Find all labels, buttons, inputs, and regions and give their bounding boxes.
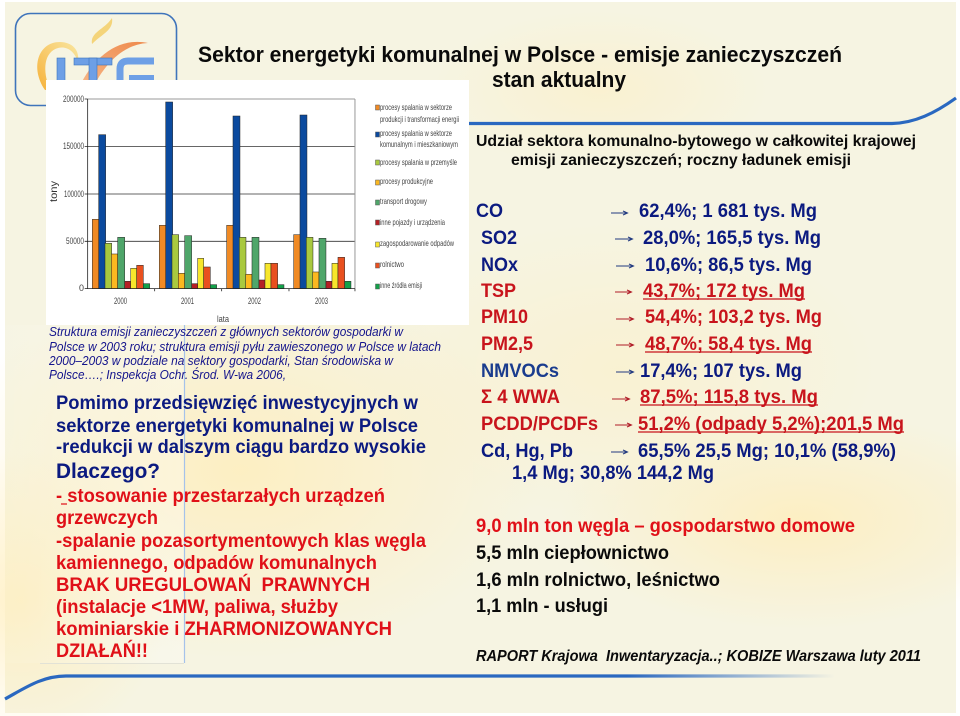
divider: bottom blue curve [5,676,835,699]
chart axis labels [49,94,328,325]
chart legend: produkcji i transformacji energii [380,115,459,124]
chart legend: procesy spalania w sektorze [380,129,452,138]
text block: przyczyny: kominiarskie i ZHARMONIZOWANYCH [56,619,392,640]
row: metale: Cd, Hg, Pb [481,441,573,462]
text block: pomimo przedsięwzięć: Pomimo przedsięwzięć inwestycyjnych w [56,393,418,414]
row: metale: 1,4 Mg; 30,8% 144,2 Mg [512,463,714,484]
text block: pomimo przedsięwzięć [56,393,426,483]
coal consumption list: 1,1 mln - usługi [476,596,608,617]
title: stan aktualny [492,67,627,92]
row: CO: CO [476,201,503,222]
chart legend: inne źródła emisji [380,281,422,290]
row: CO [476,201,817,222]
row: PCDD/PCDFs: PCDD/PCDFs [481,414,598,435]
chart axis labels: 50000 [66,236,84,247]
text block: przyczyny [56,486,426,662]
chart axis labels: lata [217,314,230,325]
panel: chart image [46,80,469,325]
row: PM10 [481,307,822,328]
chart axis labels: 100000 [64,189,84,200]
row: NOx: NOx [481,255,518,276]
chart legend: komunalnym i mieszkaniowym [380,140,458,149]
chart axis labels: 150000 [63,141,84,152]
row: PCDD/PCDFs: 51,2% (odpady 5,2%);201,5 Mg [638,414,904,435]
text block: przyczyny: kamiennego, odpadów komunalnych [56,553,377,574]
coal consumption list: 1,6 mln rolnictwo, leśnictwo [476,570,720,591]
subtitle: udział sektora [476,133,916,169]
row: NOx: 10,6%; 86,5 tys. Mg [645,255,812,276]
row: NMVOCs: NMVOCs [481,361,559,382]
text block: przyczyny: (instalacje <1MW, paliwa, służby [56,597,338,618]
chart axis labels: 2000 [114,296,127,307]
row: SO2 [481,228,821,249]
row: suma WWA [481,387,818,408]
row: TSP [481,281,805,302]
text block: przyczyny: -spalanie pozasortymentowych klas węgla [56,531,426,552]
bar chart: emisje pyłu 2000-2003 [85,99,355,291]
source note: RAPORT Krajowa Inwentaryzacja..; KOBIZE Warszawa luty 2011 [476,648,921,665]
row: TSP: 43,7%; 172 tys. Mg [643,281,805,302]
text block: przyczyny: BRAK UREGULOWAŃ PRAWNYCH [56,574,370,596]
icon: ITC logo [16,14,176,106]
title [198,42,842,92]
chart caption: Polsce….; Inspekcja Ochr. Środ. W-wa 2006, [49,367,286,382]
coal consumption list [476,516,855,617]
chart legend [376,103,459,290]
row: CO: 62,4%; 1 681 tys. Mg [639,201,817,222]
row: PM10: PM10 [481,307,528,328]
row: TSP: TSP [481,281,516,302]
panel: left text backing [5,320,184,664]
subtitle: udział sektora: Udział sektora komunalno-bytowego w całkowitej krajowej [476,133,916,150]
row: PM2,5: PM2,5 [481,334,533,355]
subtitle: udział sektora: emisji zanieczyszczeń; roczny ładunek emisji [511,152,851,169]
row: PM2,5 [481,334,812,355]
chart legend: rolnictwo [380,260,404,269]
row: metale [481,441,896,484]
chart legend: procesy spalania w przemyśle [380,158,457,167]
chart caption: Struktura emisji zanieczyszczeń z głównych sektorów gospodarki w [49,324,404,339]
emissions list [476,201,904,484]
row: metale: 65,5% 25,5 Mg; 10,1% (58,9%) [638,441,896,462]
text block: pomimo przedsięwzięć: Dlaczego? [56,459,160,483]
row: suma WWA: 87,5%; 115,8 tys. Mg [640,387,818,408]
chart legend: transport drogowy [380,197,428,206]
chart axis labels: 200000 [63,94,84,105]
row: suma WWA: Σ 4 WWA [481,387,560,408]
row: PCDD/PCDFs [481,414,904,435]
title: Sektor energetyki komunalnej w Polsce - emisje zanieczyszczeń [198,42,842,67]
row: NMVOCs [481,361,802,382]
row: PM2,5: 48,7%; 58,4 tys. Mg [645,334,812,355]
text block: przyczyny: DZIAŁAŃ!! [56,640,148,662]
row: SO2: 28,0%; 165,5 tys. Mg [643,228,821,249]
row: SO2: SO2 [481,228,517,249]
text block: przyczyny: - stosowanie przestarzałych urządzeń [56,486,385,507]
divider: top blue curve [469,98,956,124]
chart axis labels: 2001 [181,296,194,307]
chart legend: zagospodarowanie odpadów [380,239,454,248]
chart axis labels: 2003 [315,296,328,307]
chart axis labels: 0 [79,283,84,294]
row: PM10: 54,4%; 103,2 tys. Mg [645,307,822,328]
text block: pomimo przedsięwzięć: -redukcji w dalszym ciągu bardzo wysokie [56,437,426,458]
chart caption: Polsce w 2003 roku; struktura emisji pyłu zawieszonego w Polsce w latach [49,339,441,354]
chart caption [48,324,441,382]
chart legend: procesy spalania w sektorze [380,103,452,112]
chart legend: procesy produkcyjne [380,177,433,186]
coal consumption list: 5,5 mln ciepłownictwo [476,543,669,564]
chart axis labels: tony [49,181,60,202]
chart axis labels: 2002 [248,296,261,307]
row: NMVOCs: 17,4%; 107 tys. Mg [640,361,802,382]
text block: przyczyny: grzewczych [56,508,158,529]
chart caption: 2000–2003 w podziale na sektory gospodarki, Stan środowiska w [48,353,394,368]
text block: pomimo przedsięwzięć: sektorze energetyki komunalnej w Polsce [56,416,418,437]
row: NOx [481,255,812,276]
chart legend: inne pojazdy i urządzenia [380,218,445,227]
coal consumption list: 9,0 mln ton węgla – gospodarstwo domowe [476,516,855,537]
